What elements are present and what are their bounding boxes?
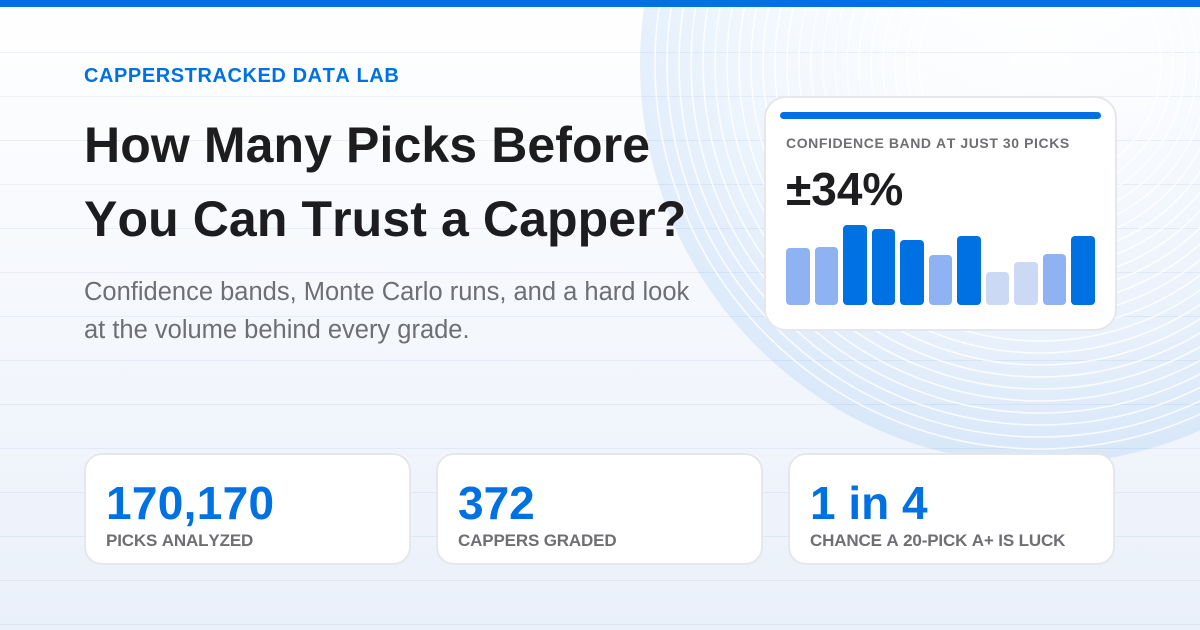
stat number: 1 in 4 <box>810 477 928 529</box>
stat label: PICKS ANALYZED <box>106 531 253 550</box>
panel card background <box>764 96 1117 331</box>
title: You Can Trust a Capper? <box>84 191 686 247</box>
top accent bar <box>0 0 1200 7</box>
panel: confidence band <box>764 96 1117 331</box>
stat card: cappers graded <box>436 453 763 565</box>
eyebrow label: CAPPERSTRACKED DATA LAB <box>84 65 399 87</box>
subtitle: Confidence bands, Monte Carlo runs, and a hard look <box>84 278 689 306</box>
bar chart <box>786 225 1095 305</box>
card background <box>84 453 411 565</box>
panel accent bar <box>780 112 1101 119</box>
panel label: CONFIDENCE BAND AT JUST 30 PICKS <box>786 135 1070 151</box>
subtitle <box>84 278 690 344</box>
card background <box>436 453 763 565</box>
title: How Many Picks Before <box>84 117 650 173</box>
subtitle: at the volume behind every grade. <box>84 316 470 344</box>
panel big number: ±34% <box>786 163 903 215</box>
stat card: picks analyzed <box>84 453 411 565</box>
stat number: 170,170 <box>106 477 274 529</box>
stat number: 372 <box>458 477 535 529</box>
stat card: luck chance <box>788 453 1115 565</box>
stat label: CAPPERS GRADED <box>458 531 616 550</box>
card background <box>788 453 1115 565</box>
title <box>84 117 686 247</box>
stat label: CHANCE A 20-PICK A+ IS LUCK <box>810 531 1065 550</box>
